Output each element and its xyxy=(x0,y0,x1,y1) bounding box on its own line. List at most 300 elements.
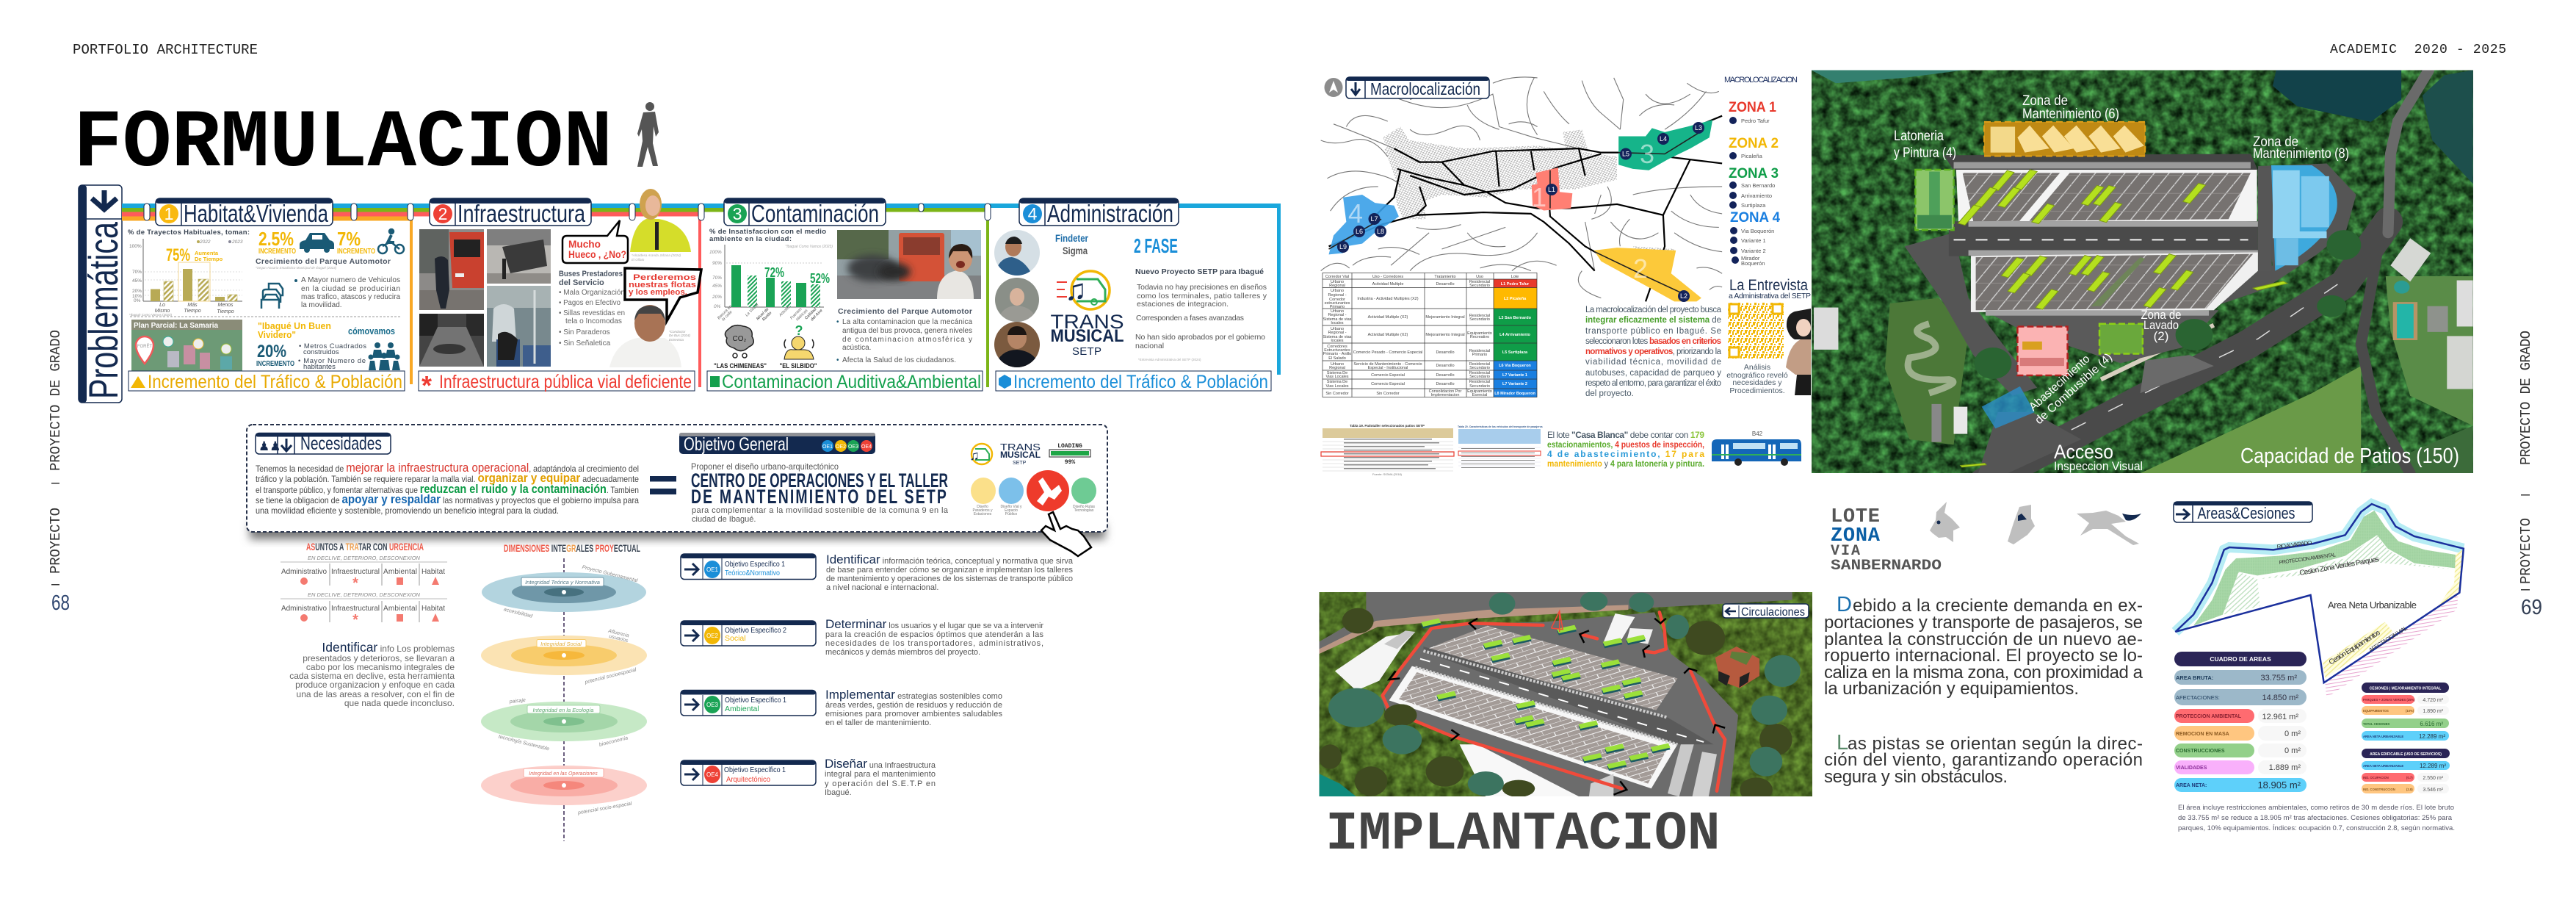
objective tab: OE1: Objetivo Específico 1 xyxy=(725,560,785,569)
bar chart: insatisfaccion: Hidricas xyxy=(795,309,809,322)
bar chart: trayectos: 20% xyxy=(132,289,142,294)
site plan labels: Cesion Zona Verdes Parques xyxy=(2299,555,2380,577)
icon circles: objetivos: Diseño Rutas xyxy=(1073,505,1096,509)
panel: contaminacion content: antigua del bus provoca, genera niveles xyxy=(842,327,972,335)
title: FORMULACION: FORMULACION xyxy=(73,98,612,190)
panel: administracion content: nacional xyxy=(1135,342,1164,350)
banner: Incremento trafico 2: Incremento del Tráfico & Población xyxy=(1013,372,1268,392)
bar chart: insatisfaccion: 72% xyxy=(764,265,784,280)
table: lotes: Secundario xyxy=(1469,284,1490,288)
bar chart: insatisfaccion: 45% xyxy=(712,284,722,289)
diagram: dimensiones: bioeconomía xyxy=(598,735,629,748)
table: caracteristicas xyxy=(1458,425,1543,468)
text: macrolocalizacion: autobuses, capacidad de parqueo y xyxy=(1585,369,1721,378)
panel: contaminacion content: *Ibagué Como Vamos (2023) xyxy=(785,245,833,249)
text: identificar problemas: cada sistema en declive, esta herramienta xyxy=(289,671,455,681)
table: cuadro de areas: AREA BRUTA: xyxy=(2176,674,2213,681)
photo: Plan Parcial La Samaria: Plan Parcial: La Samaria xyxy=(134,322,218,330)
panel: administracion content: *Entrevista Administrativa del SETP (2024) xyxy=(1138,358,1201,361)
table: lotes: Desarrollo xyxy=(1436,373,1455,378)
table: cesiones: TOTAL CESIONES xyxy=(2363,722,2390,726)
heading tab: Objetivo General: OE4 xyxy=(861,444,872,450)
table: lotes: L7 Variante 2 xyxy=(1502,382,1527,386)
site plan labels: RIO ALVARADO xyxy=(2276,539,2312,550)
bar chart: trayectos: 100% xyxy=(129,244,142,249)
table: cuadro de areas: REMOCION EN MASA xyxy=(2176,732,2229,737)
heading tab: Macrolocalizacion xyxy=(1346,77,1489,98)
text: la entrevista xyxy=(1729,277,1811,300)
text: necesidades: Tenemos la necesidad de mejorar la infraestructura operacional, adaptándola al crecimiento del xyxy=(256,461,639,475)
ellipse: social: Integridad Social xyxy=(540,641,582,647)
text: macrolocalizacion: viabilidad técnica, movilidad de xyxy=(1585,358,1721,367)
panel: areas y cesiones xyxy=(2174,502,2464,832)
illustration: woman with arms crossed xyxy=(1786,309,1811,395)
panel: habitat content: • Metros Cuadrados xyxy=(299,342,366,350)
text: las pistas: as pistas se orientan según la direc- xyxy=(1848,734,2143,754)
bar chart: insatisfaccion: 100% xyxy=(709,250,722,255)
text: macrolocalizacion: del proyecto. xyxy=(1585,389,1634,398)
table: lotes: Recreativo xyxy=(1470,335,1489,339)
legend: zonas: ZONA 4 xyxy=(1730,210,1780,226)
table: cesiones: PARQUES + ZONAS VERDES (25%) xyxy=(2363,698,2415,702)
objective tab: OE1: Teórico&Normativo xyxy=(725,569,780,577)
table: lotes: Corredor xyxy=(1329,298,1345,302)
table: lotes: Servicio de Mantenimiento - Comercio xyxy=(1353,362,1422,367)
objective tab: OE3: OE3 xyxy=(706,702,719,708)
right margin labels xyxy=(2518,331,2542,619)
heading: centro de operaciones xyxy=(691,469,948,508)
text: casa blanca: 4 de abastecimiento, 17 para xyxy=(1547,449,1704,459)
panel: habitat content: *Segun Anuario Estadistico Municipal de Ibagué (2023) xyxy=(256,266,337,270)
objective tab: OE4 xyxy=(681,760,816,785)
chevrons xyxy=(1389,619,1725,795)
icon: down arrow xyxy=(92,190,117,209)
aerial labels: Abastecimiento xyxy=(2027,353,2093,414)
table: lotes: Regional xyxy=(1329,366,1345,370)
table: cesiones: 12.289 m² xyxy=(2419,733,2445,740)
white buildings xyxy=(1335,632,1415,691)
text: la entrevista: La Entrevista xyxy=(1729,277,1808,294)
map zone 4 xyxy=(1329,195,1399,254)
icon circles: objetivos: Tecnologías xyxy=(1074,508,1094,513)
legend: zonas: Via Boquerón xyxy=(1741,228,1774,234)
list: buses prestadores xyxy=(559,270,625,348)
bar chart: insatisfaccion: del Aire xyxy=(810,309,824,322)
header: portfolio label: PORTFOLIO ARCHITECTURE xyxy=(73,42,258,58)
photo: mayor woman xyxy=(630,189,691,262)
heading: dimensiones integrales: DIMENSIONES INTEGRALES PROYECTUAL xyxy=(504,542,640,554)
icon: motorcycle xyxy=(378,229,404,253)
legend: zonas xyxy=(1724,76,1798,267)
map: Colombia xyxy=(1930,502,1960,542)
diagram: dimensiones: potencial socioespacial xyxy=(584,667,637,685)
list: buses prestadores: del Servicio xyxy=(559,278,604,287)
list: buses prestadores: • Mala Organización xyxy=(559,289,625,297)
diagram: dimensiones: Proyecto Gubernamental xyxy=(582,565,638,583)
stat: 2.5 percent: 2.5% xyxy=(258,228,294,250)
photo: bus interior xyxy=(487,286,551,367)
heading tab: Objetivo General: OE1 xyxy=(822,444,833,450)
panel: habitat content: Crecimiento del Parque Automotor xyxy=(256,257,391,266)
table: cuadro de areas: 0 m² xyxy=(2284,746,2301,755)
table: cuadro de areas: 0 m² xyxy=(2284,730,2301,738)
ellipse: ecologia: Integridad en la Ecología xyxy=(533,707,593,713)
icon: el silbido person xyxy=(780,323,817,370)
bar chart: trayectos: 2022 xyxy=(199,240,211,245)
panel: administracion content: estaciones de integracion. xyxy=(1137,300,1229,309)
table: lotes: Residencial xyxy=(1469,314,1490,318)
banner: Infraestructura deficiente xyxy=(419,370,695,400)
table: lotes: Actividad Multiple (X2) xyxy=(1368,315,1408,320)
heading tab: Areas y Cesiones: Areas&Cesiones xyxy=(2197,504,2295,522)
table: lotes: locales xyxy=(1331,321,1344,325)
bar chart: trayectos: Menos xyxy=(217,303,234,308)
table: lotes: estructurantes xyxy=(1325,301,1350,306)
bar chart: insatisfaccion: 0% xyxy=(714,304,721,309)
aerial labels: Zona de xyxy=(2022,93,2068,109)
table: cesiones: AREA NETA URBANIZABLE xyxy=(2363,764,2403,768)
stat: 2.5 percent: INCREMENTO xyxy=(258,248,296,256)
text: debido a la creciente demanda: la urbanización y equipamientos. xyxy=(1824,679,2079,699)
panel: macrolocalizacion map: L8 xyxy=(1377,228,1384,235)
panel: macrolocalizacion map: L6 xyxy=(1356,228,1363,235)
ellipse: ecologia xyxy=(481,702,647,741)
table: lotes: Sin Corredor xyxy=(1325,392,1349,396)
callout: Perderemos: nuestras flotas xyxy=(629,281,696,289)
objective tab: OE1 xyxy=(681,554,816,579)
table: lotes: Primario xyxy=(1472,353,1487,357)
table: lotes: Uso - Corredores xyxy=(1372,275,1403,279)
table: patio talleres xyxy=(1321,424,1454,476)
table: lotes: Vias Locales xyxy=(1325,375,1349,379)
stat: 7 percent: INCREMENTO xyxy=(337,248,375,256)
panel: macrolocalizacion map: L3 xyxy=(1695,124,1702,132)
photo: bus driver man: *Conductor xyxy=(669,330,686,334)
photo: Plan Parcial La Samaria xyxy=(131,320,242,371)
list: buses prestadores: • Sin Señaletica xyxy=(559,339,611,348)
text: OE4: integral para el mantenimiento xyxy=(825,770,936,779)
panel: habitat content: % de Trayectos Habituales, toman: xyxy=(128,228,250,237)
table: lotes: Esencial xyxy=(1472,393,1487,397)
loading bar: LOADING xyxy=(1057,443,1082,450)
legend: zonas: Mirador xyxy=(1741,255,1760,262)
text: identificar problemas: Identificar info Los problemas xyxy=(322,640,455,655)
bar chart: insatisfaccion xyxy=(709,245,830,322)
table: lotes: Corredores xyxy=(1327,345,1347,349)
table: cesiones: 1.890 m² xyxy=(2423,709,2444,714)
aerial shapes xyxy=(1812,71,2473,483)
photo: potholed street xyxy=(419,314,484,367)
left margin labels: PROYECTO DE GRADO xyxy=(48,330,64,471)
list: buses prestadores: tela o Incomodas xyxy=(565,317,622,325)
table: lotes: Mejoramiento Integral xyxy=(1425,315,1465,320)
table: cesiones: AREA EDIFICABLE (USO DE SERVICIOS) xyxy=(2370,752,2442,757)
panel: necesidades y objetivo general: Proponer el diseño urbano-arquitectónico xyxy=(691,461,839,472)
text: OE4: Diseñar una Infraestructura xyxy=(825,757,936,771)
panel: habitat content: construidos xyxy=(303,348,339,356)
matrix: asuntos: Administrativo xyxy=(281,605,327,613)
ellipse: social xyxy=(481,635,647,675)
map zone numerals: 2 xyxy=(1633,253,1648,284)
panel: infraestructura photos xyxy=(419,229,551,367)
map zone 3 xyxy=(1618,120,1712,170)
building: mantenimiento 8 xyxy=(2271,165,2337,271)
text: las pistas: ción del viento, garantizando operación xyxy=(1824,750,2143,770)
map zone 1 xyxy=(1532,168,1572,210)
matrix: asuntos: Habitat xyxy=(422,605,445,613)
text: OE1 xyxy=(826,552,1074,592)
photo: bus driver man: Entrevista xyxy=(669,338,684,342)
panel: contaminacion content: de contaminacion atmosférica y xyxy=(842,336,972,344)
stat: 7 percent: 7% xyxy=(337,228,361,250)
icon: stacked cars xyxy=(261,284,283,309)
loading bar xyxy=(1049,443,1090,466)
table: cesiones: (0.7) xyxy=(2406,776,2413,779)
bar chart: insatisfaccion: 52% xyxy=(810,271,830,286)
icon circles: objetivos: Paraderos y xyxy=(973,508,993,513)
banner: Incremento trafico 1: Incremento del Tráfico & Población xyxy=(148,372,402,392)
table: cesiones xyxy=(2362,683,2450,793)
table: lotes: Vias Locales xyxy=(1325,384,1349,389)
bar chart: trayectos: 10% xyxy=(132,294,142,299)
photo: Plan Parcial La Samaria: FORÊT xyxy=(137,343,152,349)
map zone numerals xyxy=(1348,139,1654,284)
bar chart: insatisfaccion: Fuentes xyxy=(789,307,803,320)
map zone numerals: 4 xyxy=(1348,198,1363,228)
text: OE3: en el taller de mantenimiento. xyxy=(825,719,931,727)
table: cuadro de areas: 1.889 m² xyxy=(2269,763,2301,772)
panel: macrolocalizacion map: L9 xyxy=(1339,243,1347,251)
table: lotes: Urbano xyxy=(1331,362,1344,367)
panel: macrolocalizacion map: L5 xyxy=(1622,150,1629,157)
panel: contaminacion content: Afecta la Salud de los ciudadanos. xyxy=(842,356,956,364)
icon circles: objetivos: Estaciones xyxy=(974,512,992,516)
header: academic years: ACADEMIC 2020 - 2025 xyxy=(2330,43,2506,57)
legend: zonas: ZONA 3 xyxy=(1729,166,1779,181)
legend: zonas: ZONA 1 xyxy=(1729,100,1776,115)
table: cuadro de areas: AFECTACIONES: xyxy=(2176,694,2220,701)
heading tab: Macrolocalizacion: Macrolocalización xyxy=(1370,79,1480,98)
heading tab: Contaminacion: 3 xyxy=(733,204,742,223)
icon circles: objetivos: Diseño xyxy=(977,505,988,509)
text: Procedimientos. xyxy=(1729,386,1785,395)
table: lotes: Desarrollo xyxy=(1436,364,1455,368)
matrix: asuntos: Habitat xyxy=(422,568,445,576)
legend: zonas: Boquerón xyxy=(1741,260,1765,267)
text: identificar problemas: cabo por los mecanismo integrales de xyxy=(306,662,455,672)
icon: bus B42 xyxy=(1712,431,1801,466)
right margin labels: PROYECTO DE GRADO xyxy=(2518,331,2534,465)
aerial labels: Mantenimiento (8) xyxy=(2253,146,2349,162)
photo: bus smoke and woman xyxy=(837,230,981,299)
panel: macrolocalizacion map: L2 xyxy=(1680,292,1687,300)
table: lotes: Comercio Especial xyxy=(1371,382,1405,386)
table: cuadro de areas: VIALIDADES xyxy=(2176,766,2207,771)
site plan labels: AFECTACION VIAL xyxy=(2367,624,2409,654)
logo: Trans Musical small: TRANS xyxy=(1000,442,1041,453)
objective tab: OE3 xyxy=(681,691,816,716)
legend: zonas: Picaleña xyxy=(1741,153,1763,159)
icon: people group xyxy=(369,342,400,370)
text: necesidades y xyxy=(1732,378,1782,387)
list: buses prestadores: • Pagos en Efectivo xyxy=(559,299,621,307)
table: lotes: Equipamiento xyxy=(1467,331,1492,336)
table: lotes: Secundario xyxy=(1469,375,1490,379)
text: casa blanca: mantenimiento y 4 para latonería y pintura. xyxy=(1547,458,1704,469)
diagram: dimensiones: usuarios xyxy=(609,634,629,644)
building: abastecimiento xyxy=(2017,326,2068,375)
text: OE1: de base para entender cómo se organizan e implementan los talleres xyxy=(826,566,1074,575)
table: cuadro de areas: 14.850 m² xyxy=(2262,694,2298,702)
icon: las chimeneas cloud xyxy=(714,325,767,370)
matrix: asuntos: * xyxy=(352,612,358,628)
text: macrolocalizacion: respeto al entorno, para garantizar el éxito xyxy=(1585,379,1721,388)
table: lotes: L6 Via Boqueron xyxy=(1499,364,1531,368)
objective tab: OE1: OE1 xyxy=(706,566,719,573)
left margin labels: PROYECTO xyxy=(48,508,64,574)
table: lotes: Secundario xyxy=(1469,317,1490,322)
table: lotes: El Salado xyxy=(1328,356,1346,361)
table: cesiones: CESIONES | MEJORAMIENTO INTEGRAL xyxy=(2370,686,2441,691)
panel: contaminacion content: Crecimiento del Parque Automotor xyxy=(838,307,972,316)
text: OE2: mecánicos y demás miembros del proyecto. xyxy=(825,648,980,657)
table: lotes: Comercio Pesado - Comercio Especial xyxy=(1353,350,1422,355)
text: debido a la creciente demanda: plantea la construcción de un nuevo ae- xyxy=(1824,630,2143,649)
matrix: asuntos: Administrativo xyxy=(281,568,327,576)
map zone numerals: 3 xyxy=(1640,139,1654,169)
logo: Findeter: Findeter xyxy=(1055,232,1088,244)
table: lotes: Consolidacion Por xyxy=(1429,389,1461,394)
list: buses prestadores: • Sin Paraderos xyxy=(559,328,610,336)
panel: habitat content: A Mayor numero de Vehiculos xyxy=(301,276,400,284)
matrix: asuntos: Ambiental xyxy=(383,605,417,613)
qr code xyxy=(1728,303,1784,359)
table: cuadro de areas: CUADRO DE AREAS xyxy=(2210,655,2271,663)
list: buses prestadores: • Sillas revestidas en xyxy=(559,309,625,317)
matrix: asuntos xyxy=(281,555,447,628)
banner: Infraestructura deficiente: * xyxy=(422,370,432,400)
bar chart: insatisfaccion: Basura en xyxy=(717,304,733,320)
text: identificar problemas: presentados y deterioros, se llevaran a xyxy=(303,653,455,663)
diagram: dimensiones: potencial socio-espacial xyxy=(577,802,632,816)
matrix: asuntos: Infraestructural xyxy=(331,605,380,613)
aerial labels: de Combustible (4) xyxy=(2033,351,2115,427)
table: lotes: Urbano xyxy=(1331,327,1344,331)
aerial labels: Mantenimiento (6) xyxy=(2022,107,2119,122)
bar chart: insatisfaccion: 90% xyxy=(712,261,722,266)
table: lotes: Sin Corredor xyxy=(1376,392,1400,396)
heading tab: Administracion: Administración xyxy=(1047,200,1173,227)
text: identificar problemas: una de las areas a resolver, con el fin de xyxy=(297,689,455,699)
diagram: dimensiones: Afluencia xyxy=(607,628,629,638)
heading tab: Objetivo General xyxy=(679,433,875,455)
bar chart: insatisfaccion: 20% xyxy=(712,295,722,300)
matrix: asuntos: EN DECLIVE, DETERIORO, DESCONEXION xyxy=(308,555,421,561)
text: necesidades xyxy=(256,461,639,516)
text: OE3 xyxy=(825,688,1003,727)
panel: habitat content: mas trafico, atascos y reducira xyxy=(301,293,400,301)
logo: Sigma: Sigma xyxy=(1063,245,1088,256)
icon: las chimeneas cloud: CO₂ xyxy=(733,335,747,343)
objective tab: OE3: Ambiental xyxy=(725,705,759,713)
panel: necesidades y objetivo general xyxy=(247,425,1107,532)
neighbouring buildings xyxy=(2390,238,2431,281)
table: lotes: Residencial xyxy=(1469,371,1490,375)
text: OE2: para la creación de espacios óptimos que atenderán a las xyxy=(825,630,1044,639)
callout: Mucho Hueco: Hueco , ¿No? xyxy=(568,248,626,260)
site plan labels: Cesión Equipamientos xyxy=(2328,629,2381,667)
text: casa blanca: estacionamientos, 4 puestos de inspección, xyxy=(1547,439,1704,450)
table: lotes: Mejoramiento Integral xyxy=(1425,333,1465,337)
photo: bus driver man: De Bus (2024) xyxy=(669,334,691,337)
panel: administracion content: Todavia no hay precisiones en diseños xyxy=(1137,283,1267,292)
table: lotes: Sistema De xyxy=(1327,380,1347,384)
table: lotes: Actividad Multiple xyxy=(1372,282,1403,287)
list: buses prestadores: Buses Prestadores xyxy=(559,270,623,278)
photo: portrait 3 xyxy=(994,322,1040,367)
callout: Perderemos: Perderemos xyxy=(633,273,696,282)
bar chart: trayectos: Tiempo xyxy=(184,309,201,314)
aerial labels xyxy=(1894,93,2459,473)
table: lotes: Desarrollo xyxy=(1436,382,1455,386)
legend: zonas: ZONA 2 xyxy=(1729,136,1779,151)
logo: Trans Musical: TRANS xyxy=(1050,311,1124,333)
text: OE2: Determinar los usuarios y el lugar que se va a intervenir xyxy=(825,617,1043,631)
ellipse: teorica normativa xyxy=(482,572,646,612)
table: cesiones: (10%) xyxy=(2406,709,2414,713)
table: lotes: Sistema de vias xyxy=(1323,317,1352,322)
text: Ibague Un Buen Vividero: Vividero" xyxy=(258,329,296,340)
heading tab: Infraestructura: 2 xyxy=(438,204,447,223)
table: patio talleres: Fuente: SIGMA (2018) xyxy=(1372,472,1403,476)
bar chart: trayectos: Aumenta xyxy=(195,250,219,256)
bar chart: trayectos: Mismo xyxy=(155,309,170,314)
panel: habitat content: habitantes xyxy=(303,363,336,371)
icon: pointer hand xyxy=(1041,512,1091,556)
panel: macrolocalizacion map xyxy=(1321,77,1722,302)
heading: lote zona via: ZONA xyxy=(1831,525,1881,547)
heading tab: Objetivo General: OE2 xyxy=(836,444,846,450)
left margin labels: 68 xyxy=(51,591,70,615)
logo: Trans Musical small xyxy=(969,442,1041,466)
table: lotes: Regional - xyxy=(1328,331,1347,335)
table: lotes: Sistema De xyxy=(1327,371,1347,375)
panel: macrolocalizacion map: L4 xyxy=(1660,135,1667,143)
heading tab: Infraestructura: Infraestructura xyxy=(457,200,586,227)
icon circles: objetivos: Público xyxy=(1005,512,1017,516)
table: cuadro de areas: 33.755 m² xyxy=(2260,674,2297,683)
matrix: asuntos: Ambiental xyxy=(383,568,417,576)
bar chart: trayectos: Tiempo xyxy=(217,309,234,314)
text: macrolocalizacion: integrar eficazmente el sistema de xyxy=(1585,316,1721,325)
table: lotes: Especial - Institucional xyxy=(1368,366,1408,370)
heading tab: Necesidades: ♟♟ xyxy=(258,439,281,453)
panel: administracion content: Corresponden a fases avanzadas xyxy=(1136,314,1244,323)
icon: equals xyxy=(650,476,676,494)
text: OE2 xyxy=(825,617,1044,657)
panel: administracion content xyxy=(994,230,1267,367)
site plan labels xyxy=(2276,539,2417,667)
bar chart: trayectos: Más xyxy=(187,303,198,308)
table: cesiones: IND. OCUPACION xyxy=(2363,776,2389,779)
bar chart: trayectos: *Ibagué Como Vamos (2023) xyxy=(129,313,172,317)
logo: Trans Musical xyxy=(1050,271,1124,358)
table: lotes: Urbano xyxy=(1331,309,1344,314)
panel: necesidades y objetivo general: para complementar a la movilidad sostenible de la comuna 9 en la xyxy=(692,506,949,515)
text: debido a la creciente demanda: ropuerto internacional. El proyecto se lo- xyxy=(1824,646,2143,666)
heading tab: Habitat y Vivienda: Habitat&Vivienda xyxy=(184,200,329,227)
table: lotes: Residencial xyxy=(1469,280,1490,284)
